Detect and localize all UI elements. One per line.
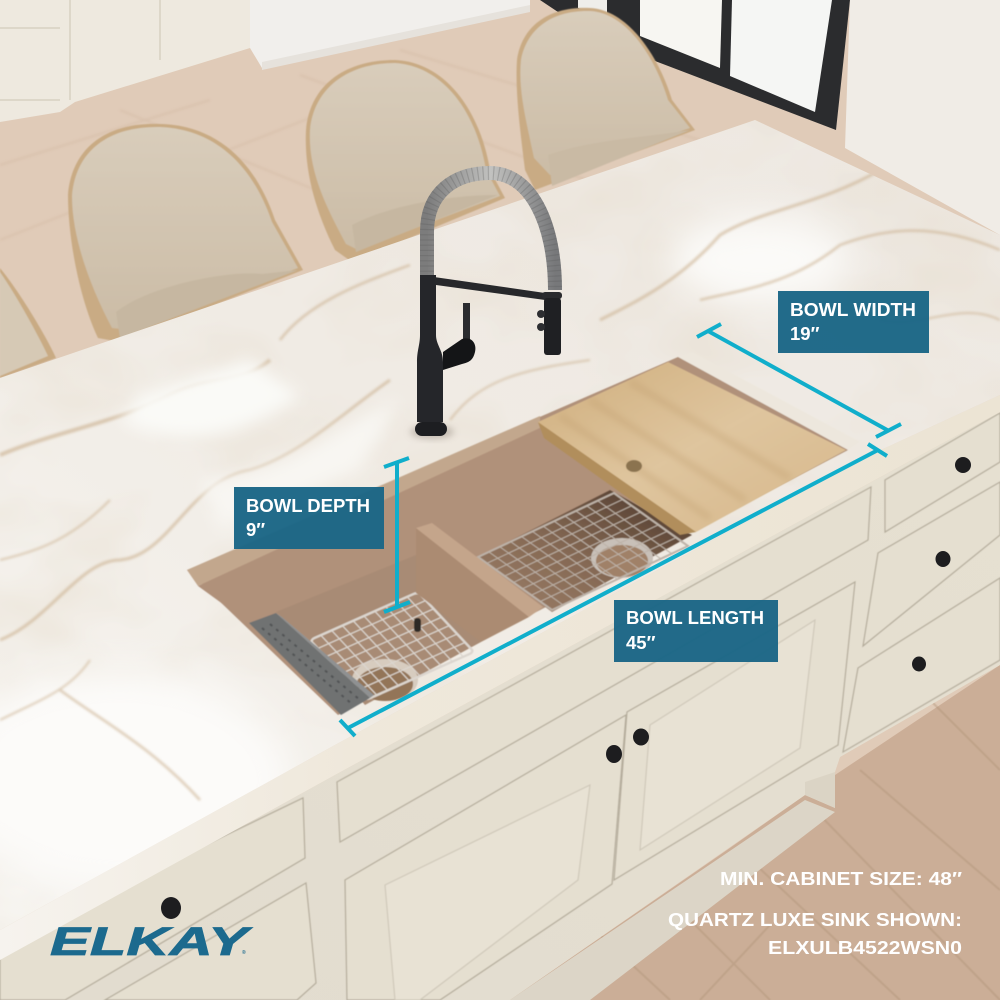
callout: bowl width: BOWL WIDTH [790,299,916,320]
divider [416,523,543,642]
window [540,0,850,130]
right wall [845,0,1000,235]
faucet [410,173,562,439]
left drain [352,659,418,701]
crossbar [434,277,545,300]
chair second [68,124,303,342]
grey tray [249,613,374,715]
logo: Elkay [50,920,253,964]
drain knob [414,618,421,632]
cutting board [538,362,846,535]
cabinet drawers and doors [0,413,1000,1000]
back wall moulding [187,416,540,586]
specs text: QUARTZ LUXE SINK SHOWN: [668,909,962,930]
callout: bowl length: BOWL LENGTH [626,607,764,628]
logo: Elkay: ELKAY [50,920,253,964]
callout: bowl width [778,291,929,353]
left wire rack [310,592,474,700]
callout: bowl depth [234,487,384,549]
specs text: MIN. CABINET SIZE: 48″ [720,868,962,889]
island cabinet base [0,412,1000,1000]
faucet shadow [410,425,454,439]
right drain [591,538,653,578]
cabinet knobs [161,457,971,919]
bowl width dimension [697,324,901,437]
chair far left [0,268,56,378]
spring hose [427,173,555,290]
faucet body [417,275,443,422]
callout: bowl length: 45″ [626,632,656,653]
right wire rack [478,493,688,610]
back cabinets and wall [0,0,530,122]
callout: bowl depth: BOWL DEPTH [246,495,370,516]
left bowl floor [276,555,481,705]
chair third [306,60,505,262]
spray head [542,292,562,299]
callout: bowl length [614,600,778,662]
callout: bowl depth: 9″ [246,519,265,540]
right bowl floor [478,490,692,612]
logo: Elkay: ® [242,949,246,956]
specs text: ELXULB4522WSN0 [768,937,962,958]
handle [463,303,470,347]
bowl length dimension [340,444,887,736]
chair fourth [517,8,695,190]
bowl depth dimension [384,458,410,612]
specs text [668,868,962,958]
sink basin [187,352,860,715]
callout: bowl width: 19″ [790,323,820,344]
bowl wall [198,428,610,623]
